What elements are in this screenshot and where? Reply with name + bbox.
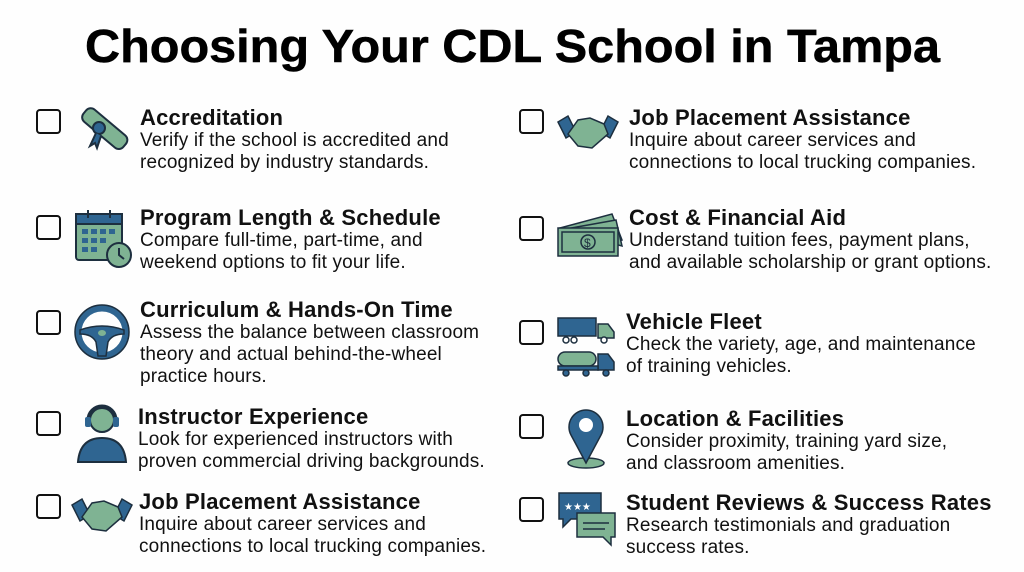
icon: location pin [567, 409, 605, 469]
item: job placement right: connections to local trucking companies. [629, 152, 976, 173]
icon: review bubbles: ★★★ [564, 502, 591, 513]
icon: calendar [75, 210, 132, 268]
item: vehicle fleet: of training vehicles. [626, 356, 792, 377]
item: vehicle fleet: Check the variety, age, and maintenance [626, 334, 976, 355]
item: accreditation: Accreditation [140, 105, 283, 130]
icon: instructor with headset [76, 404, 128, 463]
icon: money stack: $ [584, 236, 591, 250]
icon: diploma scroll [81, 107, 128, 151]
item: curriculum: theory and actual behind-the-wheel [140, 344, 442, 365]
item: job placement right [519, 105, 976, 173]
item: instructor [36, 404, 485, 472]
item: accreditation [36, 105, 449, 173]
item: instructor: proven commercial driving backgrounds. [138, 451, 485, 472]
icon: review bubbles [558, 492, 616, 547]
icon: handshake [71, 498, 133, 532]
item: vehicle fleet [519, 309, 976, 377]
item: cost: Cost & Financial Aid [629, 205, 846, 230]
item: cost [519, 205, 991, 273]
item: location: Location & Facilities [626, 406, 844, 431]
item: vehicle fleet: Vehicle Fleet [626, 309, 762, 334]
item: reviews [519, 490, 992, 558]
item: curriculum: practice hours. [140, 366, 267, 387]
item: program length [36, 205, 441, 273]
item: curriculum: Curriculum & Hands-On Time [140, 297, 453, 322]
item: location [519, 406, 947, 474]
item: curriculum: Assess the balance between classroom [140, 322, 479, 343]
item: job placement left: connections to local trucking companies. [139, 536, 486, 557]
item: job placement left [36, 489, 486, 557]
item: reviews: success rates. [626, 537, 750, 558]
item: reviews: Student Reviews & Success Rates [626, 490, 992, 515]
item: program length: weekend options to fit your life. [140, 252, 406, 273]
item: curriculum [36, 297, 479, 387]
icon: trucks [557, 317, 615, 377]
item: job placement left: Job Placement Assistance [139, 489, 421, 514]
item: job placement right: Inquire about career services and [629, 130, 916, 151]
item: accreditation: Verify if the school is accredited and [140, 130, 449, 151]
item: job placement left: Inquire about career services and [139, 514, 426, 535]
item: cost: and available scholarship or grant options. [629, 252, 991, 273]
icon: handshake [557, 115, 619, 149]
item: reviews: Research testimonials and graduation [626, 515, 950, 536]
item: program length: Compare full-time, part-time, and [140, 230, 423, 251]
item: cost: Understand tuition fees, payment plans, [629, 230, 970, 251]
item: location: Consider proximity, training yard size, [626, 431, 947, 452]
item: job placement right: Job Placement Assistance [629, 105, 911, 130]
icon: money stack [557, 213, 623, 257]
item: program length: Program Length & Schedule [140, 205, 441, 230]
item: instructor: Look for experienced instructors with [138, 429, 453, 450]
item: instructor: Instructor Experience [138, 404, 368, 429]
title: Choosing Your CDL School in Tampa [85, 20, 940, 72]
item: location: and classroom amenities. [626, 453, 845, 474]
item: accreditation: recognized by industry standards. [140, 152, 429, 173]
icon: steering wheel [74, 304, 130, 360]
